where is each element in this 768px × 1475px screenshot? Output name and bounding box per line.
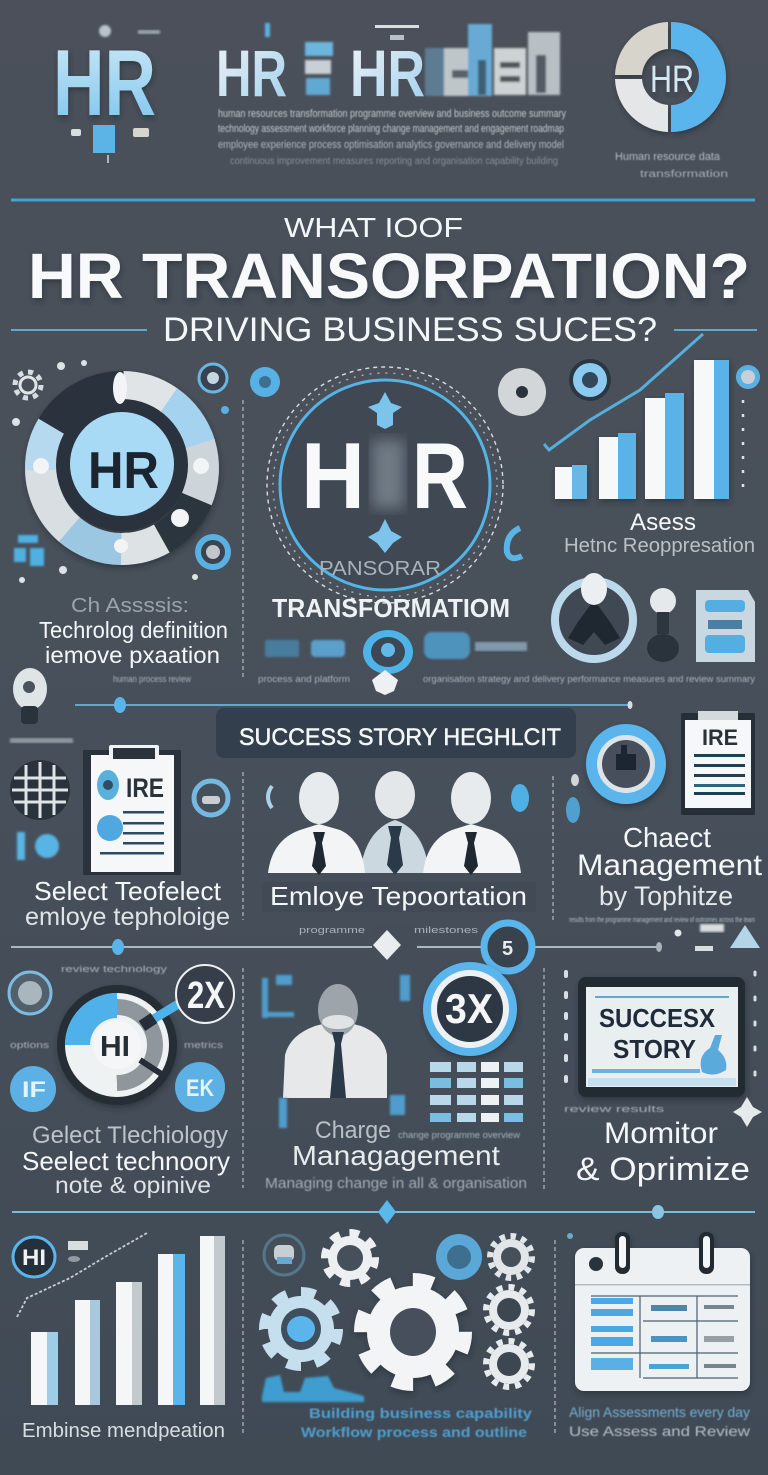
change management text: by Tophitze bbox=[599, 881, 733, 911]
fine print: metrics bbox=[184, 1040, 224, 1050]
icon: blue ring badge bbox=[194, 781, 228, 815]
technology text: Seelect technoory bbox=[22, 1146, 230, 1176]
icon: white gear bottom bbox=[486, 1341, 532, 1387]
block grid bbox=[430, 1062, 523, 1122]
icon: blue small gear bbox=[436, 1234, 482, 1280]
technology text bbox=[22, 1122, 230, 1198]
charge management text: Managing change in all & organisation bbox=[265, 1175, 527, 1192]
icon: blue puzzle bbox=[14, 535, 44, 566]
charge management text bbox=[265, 1117, 527, 1192]
3X badge bbox=[423, 962, 517, 1056]
icon: target dial bbox=[57, 985, 177, 1105]
large HR letters bbox=[301, 423, 468, 528]
panel: bar chart embrace bbox=[13, 1233, 225, 1442]
fine print: review technology bbox=[61, 964, 168, 974]
fine print row: organisation strategy and delivery performance measures and review summary bbox=[423, 674, 756, 684]
tablet text: SUCCESX bbox=[599, 1003, 716, 1033]
assess text bbox=[39, 595, 228, 668]
tablet text: STORY bbox=[613, 1034, 696, 1064]
change management text: Chaect bbox=[623, 822, 711, 853]
blue icons bbox=[262, 975, 410, 1128]
calendar caption: Align Assessments every day bbox=[569, 1404, 750, 1420]
fine print row: process and platform bbox=[258, 674, 350, 684]
change management text bbox=[577, 822, 763, 911]
panel: employee transportation bbox=[262, 771, 536, 912]
person left bbox=[268, 772, 365, 875]
assess text: Ch Assssis: bbox=[71, 595, 189, 617]
banner text: SUCCESS STORY HEGHLCIT bbox=[239, 724, 561, 751]
mid divider bbox=[11, 925, 662, 960]
icon: blue circle badge bbox=[586, 724, 666, 804]
panel: central HR transformation bbox=[250, 367, 756, 695]
icon: tablet bbox=[578, 977, 745, 1097]
vertical divider bbox=[242, 1240, 244, 1435]
icon: clipboard bbox=[83, 745, 181, 875]
panel: change management bbox=[566, 711, 763, 924]
icon: blue puzzle bbox=[17, 832, 59, 860]
icon: small right badge bbox=[736, 365, 760, 389]
fine print bbox=[10, 738, 73, 743]
icon: HI badge bbox=[13, 1237, 55, 1277]
change management text: Management bbox=[577, 849, 763, 882]
blue swirl icon bbox=[507, 528, 522, 558]
select text bbox=[25, 876, 230, 931]
icon: big gear bbox=[361, 1280, 465, 1384]
charge management text: change programme overview bbox=[398, 1130, 521, 1140]
mid divider: programme bbox=[299, 925, 365, 935]
icon: top star bbox=[368, 392, 402, 429]
small paragraph text: human resources transformation programme overview and business outcome summary bbox=[218, 108, 566, 120]
2X badge: 2X bbox=[187, 975, 226, 1017]
small logo accents bbox=[71, 25, 160, 163]
lower divider bbox=[12, 1200, 755, 1224]
dotted side columns bbox=[566, 972, 755, 1090]
vertical divider bbox=[552, 776, 554, 922]
icon: pawn bbox=[647, 588, 679, 662]
icon: person badge bbox=[555, 573, 633, 659]
blue badge right bbox=[175, 1062, 225, 1112]
mid divider: milestones bbox=[414, 925, 479, 935]
tablet text bbox=[599, 1003, 716, 1064]
icon: target badge bbox=[195, 534, 231, 570]
fine print: options bbox=[10, 1040, 50, 1050]
technology text: Gelect Tlechiology bbox=[32, 1122, 228, 1149]
calendar table bbox=[591, 1296, 738, 1378]
icon: bottom star bbox=[368, 519, 402, 553]
wheel label: HR bbox=[88, 442, 159, 500]
monitor text: Momitor bbox=[604, 1117, 718, 1150]
HR label two: HR bbox=[350, 36, 425, 110]
employee label backing bbox=[262, 882, 536, 912]
icon: small round badge bbox=[9, 972, 51, 1014]
icon: blue bottle bbox=[701, 1035, 726, 1075]
panel: change management 3X bbox=[262, 962, 527, 1192]
panel: calendar bbox=[567, 1232, 751, 1439]
assess sub label: Hetnc Reoppresation bbox=[564, 535, 755, 557]
decorative dots bbox=[12, 360, 229, 583]
icon: small gear bbox=[15, 372, 41, 398]
vertical divider bbox=[554, 1240, 556, 1435]
icon: top right badge bbox=[199, 364, 227, 392]
large HR letters: R bbox=[412, 423, 468, 528]
icon: white gear middle bbox=[486, 1287, 532, 1333]
small sparkle bbox=[733, 1097, 762, 1127]
large HR letters: H bbox=[301, 423, 365, 528]
blue text lines bbox=[301, 1405, 532, 1440]
blue text lines: Building business capability bbox=[309, 1405, 532, 1421]
HR label one: HR bbox=[216, 36, 287, 110]
embrace label: Embinse mendpeation bbox=[22, 1420, 225, 1442]
fine print row bbox=[258, 674, 756, 684]
wheel nodes bbox=[33, 372, 209, 553]
blue badge left bbox=[10, 1066, 56, 1112]
icon: report card bbox=[696, 590, 755, 662]
dashed rings bbox=[267, 367, 503, 603]
assess text: iemove pxaation bbox=[45, 642, 220, 668]
small paragraph text: employee experience process optimisation analytics governance and delivery model bbox=[218, 139, 564, 151]
subheading rules bbox=[11, 329, 757, 331]
vertical divider bbox=[543, 968, 545, 1190]
vertical divider bbox=[242, 968, 244, 1188]
dotted trend bbox=[17, 1233, 147, 1317]
calendar caption: Use Assess and Review bbox=[569, 1423, 751, 1439]
title block bbox=[28, 212, 750, 349]
icon: blue vehicle bbox=[262, 1375, 364, 1402]
panel: success story tablet bbox=[564, 972, 762, 1187]
monitor text bbox=[576, 1117, 750, 1187]
icon: blue gear bbox=[264, 1292, 338, 1366]
eyebrow heading: WHAT IOOF bbox=[284, 212, 463, 243]
panel: gears bbox=[262, 1233, 532, 1440]
icon: gear top bbox=[325, 1233, 375, 1283]
person right bbox=[423, 772, 521, 875]
icon: calendar bbox=[575, 1232, 750, 1391]
fine print bbox=[10, 964, 224, 1050]
icon: document bbox=[681, 711, 755, 815]
2X badge bbox=[176, 965, 234, 1023]
large HR logo: HR bbox=[53, 30, 156, 135]
blurred icon column bbox=[265, 23, 333, 95]
person middle bbox=[360, 771, 429, 875]
icon: HI badge: HI bbox=[22, 1245, 46, 1270]
blurred photo strip bbox=[425, 24, 560, 96]
icon: segmented HR wheel bbox=[8, 354, 236, 582]
assess label: Asess bbox=[630, 509, 696, 536]
icon: blue pin badge bbox=[363, 630, 413, 674]
donut caption: Human resource data bbox=[615, 151, 721, 163]
icon: grey gear badge bbox=[498, 368, 546, 416]
assess text: Techrolog definition bbox=[39, 617, 228, 643]
small paragraph text: technology assessment workforce planning change management and engagement roadmap bbox=[218, 123, 564, 135]
blurred centre smudge bbox=[372, 440, 404, 508]
donut label: HR bbox=[650, 59, 694, 101]
icon: three people bbox=[268, 771, 521, 875]
icon: white gear top right bbox=[490, 1236, 532, 1278]
small dot bbox=[567, 1233, 573, 1239]
donut chart with HR centre bbox=[615, 22, 726, 132]
trend arrow bbox=[544, 334, 703, 450]
bar chart bbox=[555, 360, 729, 499]
blue text lines: Workflow process and outline bbox=[301, 1424, 527, 1440]
vertical divider left top bbox=[242, 400, 244, 680]
panel: HR wheel bbox=[8, 354, 236, 724]
side icons bbox=[566, 774, 580, 823]
small paragraph text bbox=[218, 108, 566, 167]
blue badge right: EK bbox=[186, 1075, 215, 1102]
charge management text: Managagement bbox=[292, 1140, 500, 1171]
small blue badge bbox=[250, 367, 280, 397]
blue badge left: IF bbox=[22, 1077, 46, 1102]
employee text: Emloye Tepoortation bbox=[270, 881, 527, 911]
dotted column bbox=[742, 400, 744, 495]
calendar caption bbox=[569, 1404, 751, 1439]
curved label: PANSORAR bbox=[319, 558, 441, 580]
fine print: human process review bbox=[113, 674, 191, 684]
panel: select technology metric bbox=[9, 964, 234, 1198]
small paragraph text: continuous improvement measures reporting and organisation capability building bbox=[230, 156, 558, 167]
header band: HR banners with photos bbox=[216, 23, 566, 167]
donut caption bbox=[615, 151, 728, 180]
icon: clipboard: IRE bbox=[126, 773, 164, 803]
top bar icon bbox=[375, 25, 419, 40]
transformation label: TRANSFORMATIOM bbox=[272, 593, 510, 623]
pointers bbox=[140, 1003, 180, 1077]
select text: Select Teofelect bbox=[34, 876, 222, 906]
bar chart bbox=[31, 1236, 225, 1405]
top right ornaments bbox=[674, 924, 760, 951]
charge management text: Charge bbox=[315, 1117, 391, 1144]
icon: round badge bbox=[264, 1235, 304, 1275]
blue ring bbox=[280, 380, 490, 590]
vertical divider bbox=[242, 772, 244, 920]
main heading: HR TRANSORPATION? bbox=[28, 240, 750, 312]
small top-right badge bbox=[484, 923, 532, 971]
icon: document: IRE bbox=[702, 725, 738, 750]
donut caption: transformation bbox=[640, 169, 728, 180]
technology text: note & opinive bbox=[55, 1172, 211, 1198]
icon: globe grid bbox=[10, 760, 70, 820]
select text: emloye tepholoige bbox=[25, 903, 230, 931]
success story banner bbox=[216, 708, 576, 758]
monitor text: & Oprimize bbox=[576, 1151, 750, 1187]
fine print: review results bbox=[564, 1104, 665, 1114]
side icons bbox=[268, 784, 529, 812]
panel: assess chart bbox=[544, 334, 760, 662]
icon row bbox=[265, 630, 527, 695]
small icon bbox=[68, 1241, 88, 1262]
header band: HR logo group bbox=[53, 25, 160, 163]
top divider bbox=[11, 198, 755, 202]
icon: blue eye badge bbox=[569, 359, 611, 401]
panel: select technology bbox=[10, 738, 230, 931]
story divider bbox=[75, 697, 632, 713]
small top-right badge: 5 bbox=[502, 938, 513, 960]
icon: light bulb bbox=[13, 668, 47, 724]
person icon bbox=[283, 984, 387, 1098]
icon: target dial: HI bbox=[100, 1031, 130, 1063]
subheading: DRIVING BUSINESS SUCES? bbox=[163, 311, 657, 349]
3X badge: 3X bbox=[445, 985, 493, 1032]
